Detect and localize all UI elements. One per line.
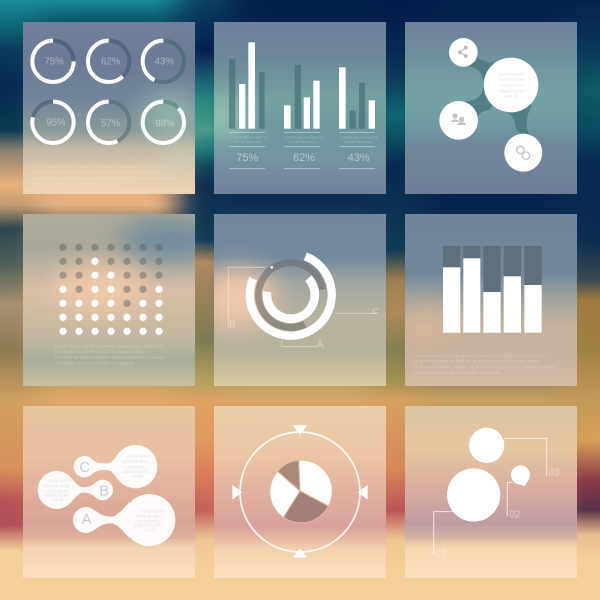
big circle with text: Lorem ipsum — [499, 71, 525, 76]
text block: nisi ut aliquip ex ea commodo consequat. — [33, 181, 121, 187]
marker dot — [270, 266, 273, 269]
callout 02: 02 — [509, 509, 521, 520]
blob B: consectetur — [45, 489, 68, 494]
panel: concentric arcs — [200, 214, 386, 386]
text block: eiusmod tempor incididunt ut labore et dolore magna aliqua. — [413, 359, 542, 365]
outer white arc — [250, 256, 332, 336]
callout lines and labels: A — [317, 340, 324, 351]
pie chart — [270, 460, 332, 523]
blob B: B — [99, 484, 109, 500]
bar group 62% — [284, 65, 324, 169]
arrow right — [358, 485, 368, 500]
bar group 62%: Lorem ipsum dolor sit — [286, 135, 324, 139]
ring 43%: 43% — [155, 57, 174, 68]
blob A: A — [82, 512, 92, 528]
panel: dot matrix — [23, 214, 195, 386]
blob A: Lorem ipsum — [141, 508, 166, 513]
blob B: Lorem ipsum — [47, 478, 73, 483]
blob C: consectetur — [123, 465, 146, 470]
text block: eiusmod tempor incididunt ut labore et dolore magna aliqua. — [33, 170, 161, 176]
callout lines and labels: C — [373, 307, 379, 316]
blob C: dolor sit amet — [123, 459, 149, 464]
icon: people — [439, 101, 478, 140]
big circle with text: sed do — [505, 94, 519, 99]
blob B: adipiscing elit — [43, 493, 70, 498]
text block: Ut enim ad minim veniam, quis nostrud exercitation ullamco laboris — [413, 365, 557, 371]
bubble 02 — [511, 465, 530, 486]
text block: Lorem ipsum dolor sit amet, consectetur adipiscing — [55, 344, 164, 350]
ring 98%: 98% — [155, 118, 175, 129]
text block: Lorem ipsum dolor sit amet, consectetur adipiscing elit, sed do — [413, 353, 547, 359]
text block: ut aliquip ex ea commodo consequat. — [55, 360, 135, 366]
text block — [55, 344, 165, 366]
big circle with text — [484, 58, 538, 112]
text block — [33, 164, 176, 187]
bar group 43%: Lorem ipsum dolor sit — [341, 135, 379, 139]
panel: progress rings — [23, 22, 206, 194]
panel: metaball labels — [23, 406, 195, 578]
blob B: dolor sit amet — [43, 483, 70, 488]
text block: Lorem ipsum dolor sit amet, consectetur adipiscing elit, sed do — [33, 164, 166, 170]
bar group 43% — [339, 67, 379, 169]
panel: bubbles with numbered callouts — [405, 406, 577, 578]
big circle with text: dolor sit amet — [499, 77, 525, 82]
bar group 75%: 75% — [236, 152, 259, 164]
blob C — [74, 445, 157, 488]
big circle with text: adipiscing elit — [499, 88, 525, 93]
outer ring — [240, 432, 360, 552]
blob C: sed do — [131, 474, 144, 479]
blob C: adipiscing elit — [123, 469, 149, 474]
callout lines and labels — [228, 267, 379, 351]
ring 95% — [32, 102, 74, 143]
arrow top — [293, 425, 307, 435]
blob C: Lorem ipsum — [126, 453, 151, 458]
callout lines and labels: B — [229, 320, 236, 331]
bubble 03 — [469, 428, 504, 463]
bar group 43%: 43% — [348, 152, 370, 164]
ring 62% — [88, 41, 129, 82]
gray arc — [259, 263, 323, 327]
bar group 75%: sed do eiusmod — [234, 140, 261, 144]
bar group 62%: 62% — [293, 152, 315, 164]
blob C: C — [79, 460, 90, 476]
ring 57% — [88, 102, 129, 143]
blob A: adipiscing elit — [134, 523, 161, 528]
stacked bar chart — [443, 246, 542, 333]
blob A: dolor sit amet — [136, 513, 163, 518]
panel: pie in ring — [214, 406, 386, 578]
text block: Ut enim ad minim veniam, quis nostrud exercitation ullamco laboris — [33, 175, 176, 181]
arrow bottom — [293, 548, 307, 558]
blob A: sed do — [143, 527, 156, 532]
text block — [413, 353, 557, 376]
ring 75%: 75% — [44, 57, 64, 68]
blob B: sed do — [51, 497, 65, 502]
panel: bar charts — [196, 22, 386, 194]
bar group 43%: sed do eiusmod — [344, 140, 371, 144]
blob B — [38, 471, 113, 509]
ring 95%: 95% — [46, 118, 66, 129]
blob A — [73, 494, 175, 546]
bubble 01 — [447, 468, 500, 522]
callout 03: 03 — [549, 468, 560, 479]
blob A: consectetur — [137, 518, 160, 523]
big circle with text: consectetur — [500, 83, 523, 88]
ring 57%: 57% — [101, 118, 121, 129]
ring 98% — [143, 102, 184, 143]
text block: Ut enim ad minim veniam, quis nostrud exercitation — [55, 355, 165, 361]
arrow left — [232, 485, 242, 500]
dot grid — [59, 244, 163, 335]
bar group 62%: sed do eiusmod — [289, 140, 316, 144]
callout 01: 01 — [436, 549, 447, 560]
icon: gears — [504, 134, 542, 172]
ring 62%: 62% — [101, 57, 121, 68]
ring 43% — [143, 41, 184, 82]
icon: share — [449, 38, 478, 67]
ring 75% — [32, 41, 74, 82]
bar group 75%: Lorem ipsum dolor sit — [231, 135, 269, 139]
text block: nisi ut aliquip ex ea commodo consequat. — [413, 370, 502, 376]
panel: stacked bars — [397, 214, 577, 386]
panel: network of circles — [405, 22, 577, 194]
connectors — [465, 54, 532, 135]
bar group 75% — [229, 42, 269, 169]
text block: incididunt ut labore et dolore magna aliqua. — [55, 349, 147, 355]
inner white arc — [267, 278, 315, 319]
